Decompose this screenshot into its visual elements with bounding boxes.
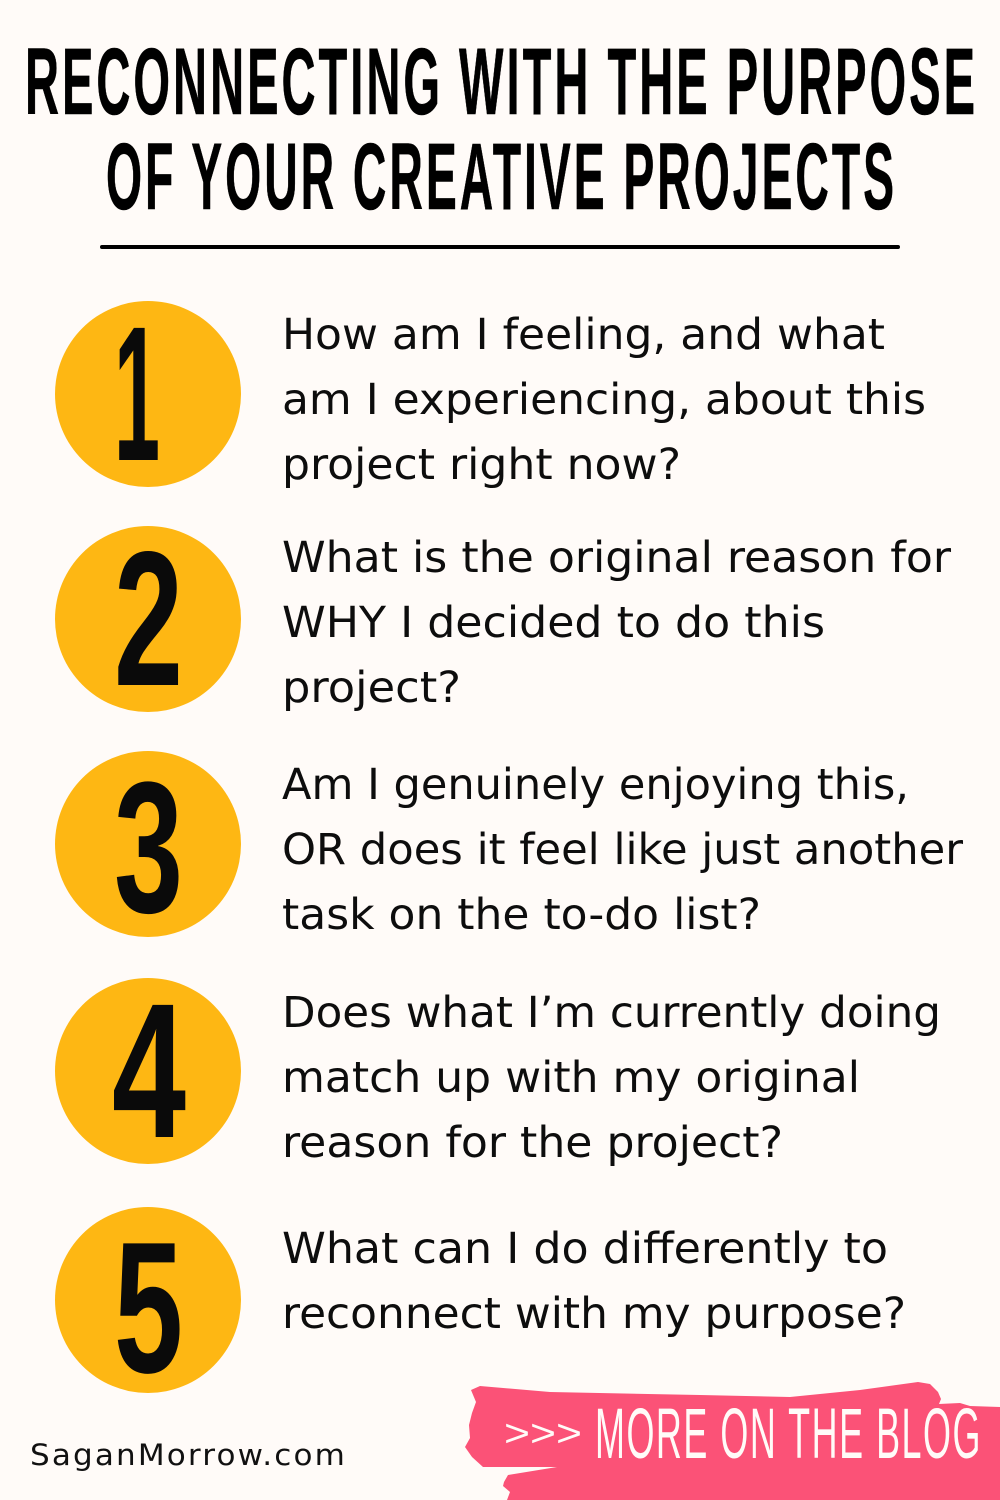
question 4 text — [282, 988, 941, 1168]
question 2 text: What is the original reason for — [282, 533, 951, 583]
question 5 text — [282, 1224, 906, 1339]
number badge 5: 5 — [114, 1203, 183, 1412]
question 5 text: reconnect with my purpose? — [282, 1289, 906, 1339]
question 1 text: am I experiencing, about this — [282, 375, 926, 425]
number badge 4: 4 — [112, 963, 186, 1178]
banner label: >>> — [504, 1413, 582, 1455]
question 1 text: How am I feeling, and what — [282, 310, 885, 360]
question 4 text: reason for the project? — [282, 1118, 783, 1168]
question 5 text: What can I do differently to — [282, 1224, 888, 1274]
step 5 — [55, 1203, 906, 1412]
step 2 — [55, 511, 951, 726]
brush stroke — [465, 1382, 1000, 1500]
question 1 text: project right now? — [282, 440, 681, 490]
number badge 1: 1 — [114, 286, 160, 501]
number badge 1 — [55, 286, 241, 501]
question 3 text: OR does it feel like just another — [282, 825, 963, 875]
step 1 — [55, 286, 926, 501]
question 2 text — [282, 533, 951, 713]
website footer: SaganMorrow.com — [30, 1438, 347, 1472]
question 3 text: task on the to-do list? — [282, 890, 761, 940]
step 4 — [55, 963, 941, 1178]
question 4 text: match up with my original — [282, 1053, 860, 1103]
number badge 2: 2 — [114, 511, 183, 726]
question 2 text: WHY I decided to do this — [282, 598, 825, 648]
question 3 text — [282, 760, 963, 940]
question 1 text — [282, 310, 926, 490]
number badge 4 — [55, 963, 241, 1178]
number badge 2 — [55, 511, 241, 726]
question 2 text: project? — [282, 663, 461, 713]
banner: more on the blog — [465, 1382, 1000, 1500]
number badge 3 — [55, 743, 241, 952]
number badge 5 — [55, 1203, 241, 1412]
number badge 3: 3 — [114, 743, 183, 952]
title — [25, 29, 978, 230]
question 3 text: Am I genuinely enjoying this, — [282, 760, 909, 810]
step 3 — [55, 743, 963, 952]
question 4 text: Does what I’m currently doing — [282, 988, 941, 1038]
